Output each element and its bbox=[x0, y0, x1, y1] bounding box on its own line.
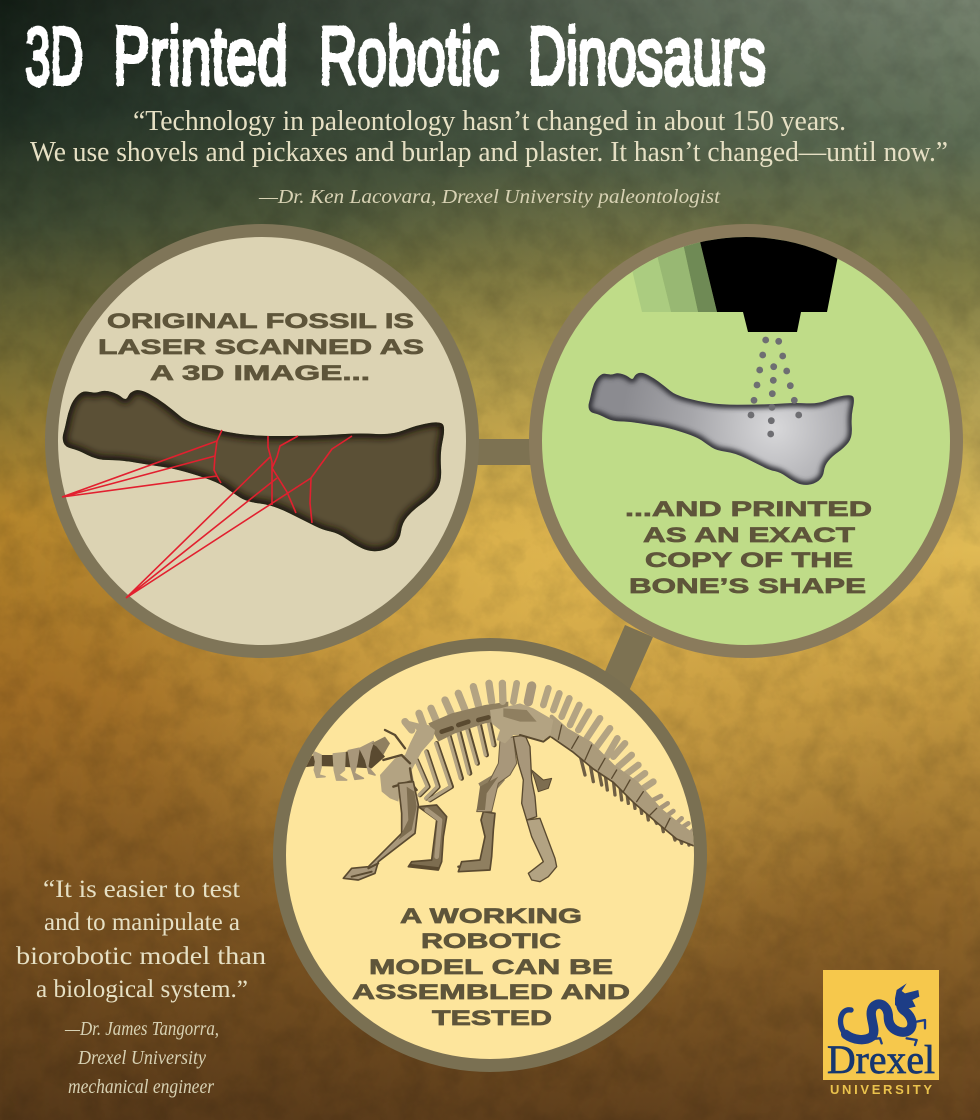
bottom-left quote: a biological system.” bbox=[36, 976, 248, 1003]
heading: robot: A WORKING bbox=[400, 905, 582, 928]
ribs front bbox=[417, 708, 494, 800]
neck base bbox=[303, 743, 385, 768]
panel: robotic model bbox=[280, 644, 700, 1066]
heading: scan bbox=[98, 310, 424, 385]
top quote: We use shovels and pickaxes and burlap and plaster. It hasn’t changed—until now.” bbox=[30, 137, 948, 168]
heading: scan: ORIGINAL FOSSIL IS bbox=[107, 310, 414, 333]
printer head bbox=[632, 237, 838, 332]
heading: print: COPY OF THE bbox=[645, 549, 853, 572]
connector: print to robot bbox=[597, 625, 653, 700]
top quote bbox=[30, 106, 948, 208]
far rear foreleg bbox=[478, 775, 505, 788]
rear leg near bbox=[513, 735, 537, 820]
heading: print: ...AND PRINTED bbox=[625, 498, 872, 521]
rear-side front leg bbox=[408, 805, 447, 870]
bottom-left quote: Drexel University bbox=[77, 1047, 206, 1069]
heading: print bbox=[625, 498, 872, 598]
top quote: “Technology in paleontology hasn’t changed in about 150 years. bbox=[133, 106, 846, 137]
heading: robot: ASSEMBLED AND bbox=[352, 981, 630, 1004]
icon: dragon bbox=[840, 983, 925, 1045]
wordmark: Drexel bbox=[827, 1037, 935, 1082]
pelvis bbox=[490, 703, 553, 743]
title: Robotic bbox=[319, 11, 499, 102]
Drexel logo bbox=[823, 970, 939, 1097]
shoulder blade bbox=[380, 720, 435, 802]
heading: scan: A 3D IMAGE... bbox=[150, 362, 370, 385]
laser lines bbox=[62, 430, 352, 598]
spines front bbox=[405, 683, 503, 730]
heading: print: AS AN EXACT bbox=[643, 524, 855, 547]
bottom-left quote: biorobotic model than bbox=[16, 943, 267, 970]
chevrons bbox=[580, 755, 689, 845]
neck vertebrae bbox=[313, 752, 325, 777]
title: Dinosaurs bbox=[528, 11, 766, 102]
backbone mid bbox=[428, 702, 508, 742]
rear thigh far bbox=[477, 737, 517, 812]
bottom-left quote: mechanical engineer bbox=[68, 1076, 214, 1098]
Drexel logo: UNIVERSITY bbox=[830, 1082, 932, 1097]
bottom-left quote bbox=[16, 876, 267, 1098]
connector: scan to print bbox=[465, 439, 545, 465]
dinosaur skeleton bbox=[303, 683, 695, 882]
panel: 3D print bbox=[536, 225, 956, 652]
near-side front leg bbox=[343, 782, 418, 880]
bottom-left quote: “It is easier to test bbox=[43, 876, 240, 903]
heading: robot bbox=[352, 905, 630, 1030]
spines rear bbox=[503, 683, 653, 792]
heading: robot: ROBOTIC bbox=[421, 930, 561, 953]
rear half of skeleton bbox=[477, 683, 695, 882]
title: Printed bbox=[113, 11, 288, 102]
tail vertebrae bbox=[552, 717, 695, 843]
bottom-left quote: and to manipulate a bbox=[44, 909, 240, 936]
heading: scan: LASER SCANNED AS bbox=[98, 336, 424, 359]
bottom-left quote: —Dr. James Tangorra, bbox=[64, 1018, 219, 1040]
printed bone bbox=[589, 373, 854, 485]
panel: laser scan bbox=[52, 230, 472, 652]
powder dots bbox=[748, 337, 802, 437]
title bbox=[25, 11, 766, 102]
front half of skeleton bbox=[303, 683, 508, 880]
fossil bone bbox=[63, 390, 444, 551]
heading: robot: MODEL CAN BE bbox=[369, 956, 613, 979]
heading: print: BONE’S SHAPE bbox=[629, 575, 866, 598]
top quote: —Dr. Ken Lacovara, Drexel University paleontologist bbox=[258, 186, 720, 208]
pubis bbox=[532, 770, 552, 792]
title: 3D bbox=[25, 11, 83, 102]
heading: robot: TESTED bbox=[432, 1007, 552, 1030]
